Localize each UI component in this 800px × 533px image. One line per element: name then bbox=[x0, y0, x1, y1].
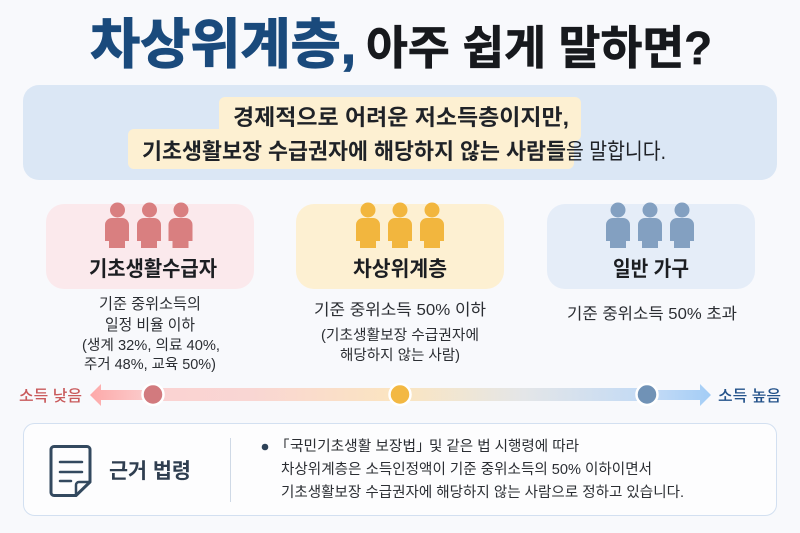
text: basic recipients description: (생계 32%, 의료 40%, bbox=[82, 337, 220, 354]
panel: legal basis bbox=[24, 424, 776, 516]
arrow: left bbox=[90, 384, 145, 406]
gradient bar bbox=[153, 388, 647, 401]
heading: 근거 법령 bbox=[109, 460, 191, 483]
text: general households description: 기준 중위소득 50% 초과 bbox=[567, 305, 737, 323]
text: basic recipients description: 기준 중위소득의 bbox=[99, 295, 201, 313]
text: near-poverty description: 기준 중위소득 50% 이하 bbox=[314, 301, 486, 319]
arrow: right bbox=[655, 384, 711, 406]
heading: 차상위계층 bbox=[353, 258, 447, 281]
text: legal basis: 「 bbox=[275, 438, 290, 455]
bullet bbox=[262, 444, 268, 450]
marker: high bbox=[636, 384, 658, 405]
text: legal basis: 차상위계층은 소득인정액이 기준 중위소득의 50% 이하이면서 bbox=[281, 461, 652, 478]
title: 아주 쉽게 말하면? bbox=[366, 22, 712, 74]
text: basic recipients description: 일정 비율 이하 bbox=[105, 316, 195, 334]
marker: middle bbox=[390, 384, 410, 405]
panel: basic recipients bbox=[46, 202, 254, 289]
icon: people blue bbox=[606, 202, 694, 248]
definition text line two: 기초생활보장 수급권자에 해당하지 않는 사람들 bbox=[142, 139, 566, 164]
icon: people red bbox=[105, 202, 192, 248]
text: legal basis: 및 같은 법 시행령에 따라 bbox=[429, 438, 579, 455]
text: legal basis: 기초생활보장 수급권자에 해당하지 않는 사람으로 정하고 있습니다. bbox=[281, 484, 684, 501]
icon: document bbox=[51, 446, 90, 496]
text: near-poverty description bbox=[314, 301, 486, 364]
panel: near-poverty group bbox=[296, 202, 504, 289]
highlight: line two bbox=[128, 129, 574, 169]
panel: definition bbox=[23, 85, 777, 180]
highlight: line one bbox=[219, 97, 581, 141]
text: legal basis: 」 bbox=[416, 439, 430, 455]
definition text line one: 경제적으로 어려운 저소득층이지만, bbox=[233, 105, 569, 130]
title: 차상위계층, bbox=[90, 15, 356, 75]
text: basic recipients description: 주거 48%, 교육 50%) bbox=[84, 356, 216, 373]
text: near-poverty description: (기초생활보장 수급권자에 bbox=[321, 327, 479, 344]
definition text line two: 을 말합니다. bbox=[566, 139, 666, 164]
marker: low bbox=[142, 384, 164, 405]
label: high income: 소득 높음 bbox=[718, 387, 781, 405]
text: legal basis: 국민기초생활 보장법 bbox=[290, 438, 416, 455]
income scale bbox=[19, 384, 781, 406]
text: basic recipients description bbox=[82, 295, 220, 373]
heading: 일반 가구 bbox=[613, 258, 689, 281]
icon: people yellow bbox=[356, 202, 444, 248]
heading: 기초생활수급자 bbox=[89, 258, 217, 281]
label: low income: 소득 낮음 bbox=[19, 387, 82, 405]
title bbox=[90, 15, 712, 75]
text: near-poverty description: 해당하지 않는 사람) bbox=[340, 347, 460, 364]
text: legal basis bbox=[275, 438, 684, 501]
divider bbox=[230, 438, 231, 502]
panel: general households bbox=[547, 202, 755, 289]
